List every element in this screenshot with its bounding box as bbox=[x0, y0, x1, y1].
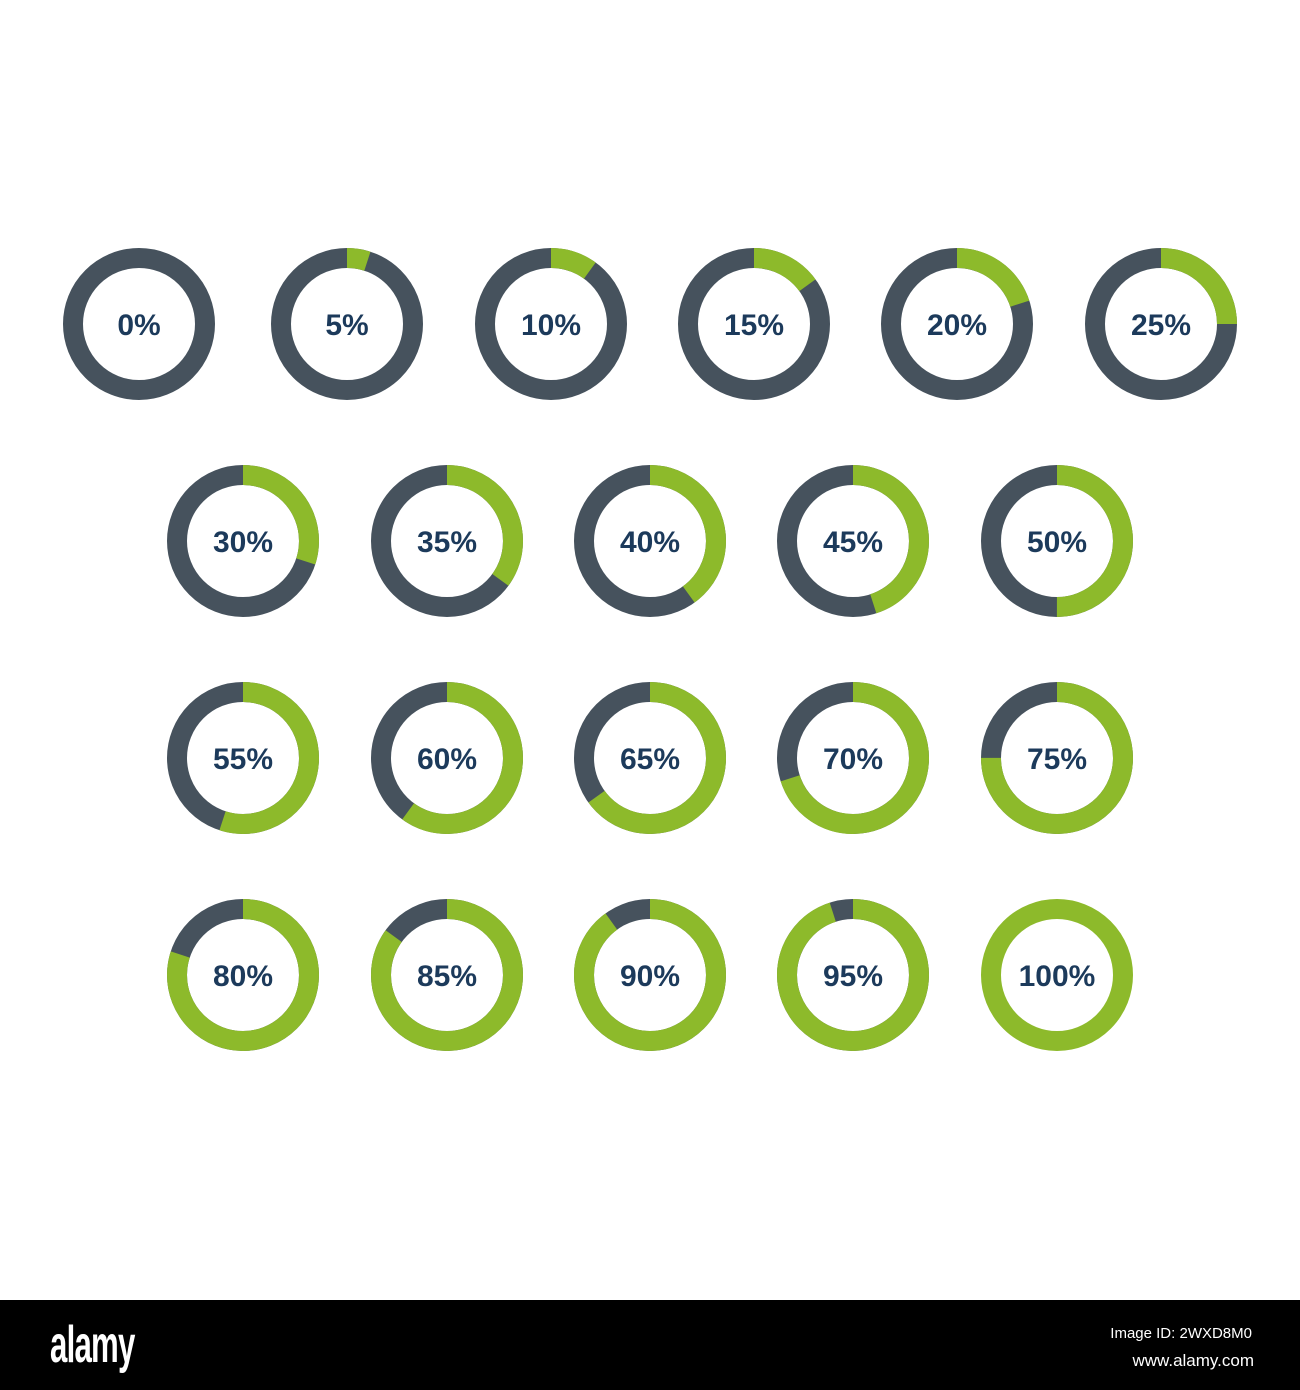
ring 50% bbox=[991, 475, 1123, 607]
ring 80%: 80% bbox=[213, 960, 273, 993]
ring 75% bbox=[991, 692, 1123, 824]
ring 95%: 95% bbox=[823, 960, 883, 993]
ring 65% bbox=[584, 692, 716, 824]
ring 10%: 10% bbox=[521, 309, 581, 342]
website text: www.alamy.com bbox=[1131, 1351, 1254, 1370]
ring 25% bbox=[1095, 258, 1227, 390]
image id text: Image ID: 2WXD8M0 bbox=[1110, 1325, 1252, 1342]
ring 55%: 55% bbox=[213, 743, 273, 776]
ring 85% bbox=[381, 909, 513, 1041]
ring 5%: 5% bbox=[325, 309, 369, 342]
ring 60% bbox=[381, 692, 513, 824]
ring 15%: 15% bbox=[724, 309, 784, 342]
ring 25%: 25% bbox=[1131, 309, 1191, 342]
ring 10% bbox=[485, 258, 617, 390]
ring 100% bbox=[991, 909, 1123, 1041]
ring 45%: 45% bbox=[823, 526, 883, 559]
ring 30% bbox=[177, 475, 309, 607]
ring 70%: 70% bbox=[823, 743, 883, 776]
ring 55% bbox=[177, 692, 309, 824]
ring 40% bbox=[584, 475, 716, 607]
ring 20%: 20% bbox=[927, 309, 987, 342]
ring 45% bbox=[787, 475, 919, 607]
ring 30%: 30% bbox=[213, 526, 273, 559]
footer bar bbox=[0, 1300, 1300, 1390]
ring 50%: 50% bbox=[1027, 526, 1087, 559]
ring 60%: 60% bbox=[417, 743, 477, 776]
ring 95% bbox=[787, 909, 919, 1041]
ring 65%: 65% bbox=[620, 743, 680, 776]
ring 15% bbox=[688, 258, 820, 390]
ring 85%: 85% bbox=[417, 960, 477, 993]
ring 75%: 75% bbox=[1027, 743, 1087, 776]
ring 35% bbox=[381, 475, 513, 607]
ring 5% bbox=[281, 258, 413, 390]
ring 80% bbox=[177, 909, 309, 1041]
logo: alamy: alamy bbox=[50, 1316, 135, 1374]
ring 20% bbox=[891, 258, 1023, 390]
ring 70% bbox=[787, 692, 919, 824]
ring 90% bbox=[584, 909, 716, 1041]
ring 40%: 40% bbox=[620, 526, 680, 559]
ring 0%: 0% bbox=[117, 309, 161, 342]
ring 0% bbox=[73, 258, 205, 390]
ring 35%: 35% bbox=[417, 526, 477, 559]
ring 90%: 90% bbox=[620, 960, 680, 993]
ring 100%: 100% bbox=[1019, 960, 1095, 993]
